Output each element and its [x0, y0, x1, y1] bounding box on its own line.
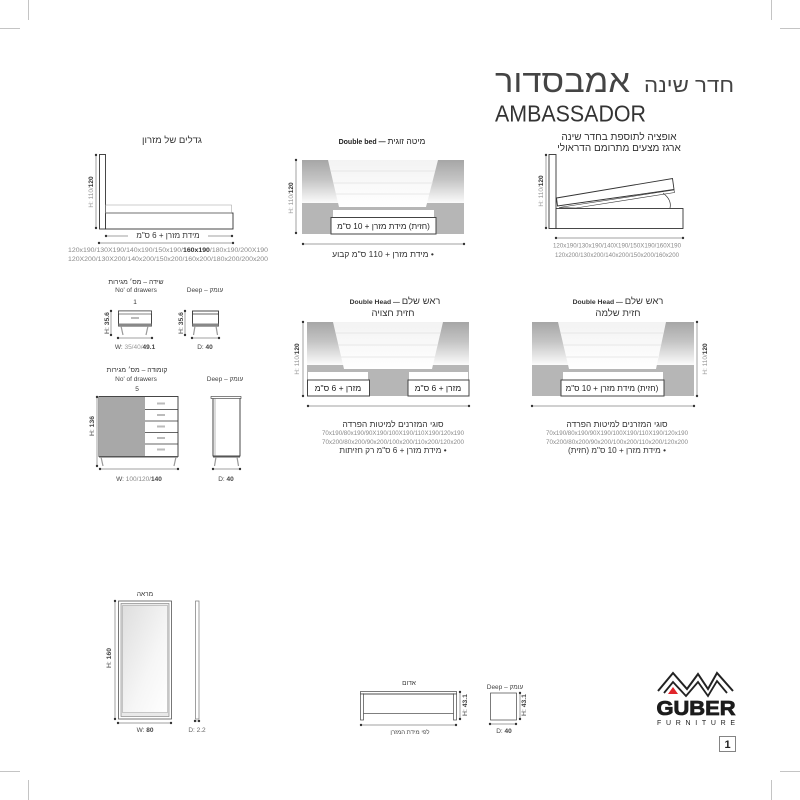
- heading: Double bed — מיטה זוגית: [339, 136, 426, 146]
- panel: double head, full front: [532, 295, 709, 455]
- panel: double bed: [288, 136, 464, 259]
- panel: nightstand: H: 35.6: [104, 312, 111, 334]
- panel: double bed: (חזית) מידת מזרן + 10 ס"מ: [337, 222, 430, 231]
- panel: nightstand depth: [178, 287, 223, 351]
- panel: double head, full front: H: 110/120: [702, 343, 709, 375]
- panel: chest of drawers: No' of drawers: [115, 376, 158, 383]
- panel: nightstand depth: Deep – עומק: [187, 287, 223, 294]
- mattress types text: סוגי המזרנים למיטות הפרדה: [342, 419, 444, 429]
- panel: mattress sizes side view: 120x190/130X190/140x190/150x190/ 160x190 /180x190/200X190: [68, 247, 268, 254]
- panel: double head, full front: (חזית) מידת מזרן + 10 ס"מ: [566, 384, 659, 393]
- mattress types text: סוגי המזרנים למיטות הפרדה: [566, 419, 668, 429]
- logo: Guber Furniture: GUBER: [656, 698, 736, 720]
- heading: גדלים של מזרון: [142, 134, 202, 146]
- panel: hydraulic lift bed option: 120x190/130x190/140X190/150X190/160X190: [553, 242, 681, 250]
- logo: Guber Furniture: FURNITURE: [657, 720, 735, 727]
- title: אמבסדור: [495, 63, 630, 99]
- panel: mirror: [106, 591, 206, 734]
- title: AMBASSADOR: [495, 100, 646, 126]
- panel: bench: [360, 680, 469, 736]
- panel: double head, partial front: 70x200/80x200/90x200/100x200/110x200/120x200: [322, 439, 464, 446]
- panel: bench: אדום: [402, 680, 416, 687]
- panel: nightstand: 1: [133, 299, 137, 306]
- heading: Double Head — ראש שלם: [350, 295, 440, 307]
- panel: bench depth: Deep – עומק: [487, 684, 523, 691]
- panel: mirror: מראה: [137, 591, 153, 598]
- panel: nightstand: [104, 279, 164, 351]
- panel: bench depth: D: 40: [496, 728, 512, 735]
- panel: nightstand depth: D: 40: [197, 344, 213, 351]
- panel: mattress sizes side view: מידת מזרן + 6 ס"מ: [136, 231, 200, 240]
- panel: mirror: D: 2.2: [188, 727, 206, 734]
- panel: nightstand: W: 35/40/49.1: [115, 344, 156, 351]
- page number: [720, 736, 736, 752]
- panel: bench: לפי מידת המזרן: [390, 728, 430, 736]
- panel: double head, partial front: • מידת מזרן + 6 ס"מ רק חזיתות: [339, 446, 447, 455]
- panel: mirror: H: 160: [106, 648, 113, 668]
- panel: mirror: W: 80: [137, 727, 154, 734]
- panel: bench depth: H: 43.1: [521, 694, 528, 716]
- panel: nightstand: שידה – מס׳ מגירות: [108, 279, 164, 286]
- panel: double head, partial front: חזית חצויה: [371, 308, 415, 319]
- logo: Guber Furniture: [656, 673, 736, 727]
- panel: mattress sizes side view: [68, 134, 268, 263]
- page number: 1: [724, 739, 731, 751]
- panel: double head, full front: • מידת מזרן + 10 ס"מ (חזית): [568, 446, 666, 455]
- panel: nightstand: No' of drawers: [115, 287, 158, 294]
- panel: chest depth: Deep – עומק: [207, 376, 243, 383]
- panel: double head, full front: 70x190/80x190/90X190/100X190/110X190/120x190: [546, 430, 688, 437]
- panel: chest of drawers: [89, 367, 178, 483]
- panel: chest depth: D: 40: [218, 476, 234, 483]
- icon: red triangle: [668, 687, 678, 694]
- panel: double bed: H: 110/120: [288, 182, 295, 214]
- panel: double head, full front: חזית שלמה: [595, 307, 641, 319]
- title: חדר שינה: [644, 75, 734, 97]
- panel: chest of drawers: W: 100/120/140: [116, 476, 162, 483]
- panel: nightstand depth: H: 35.6: [178, 312, 185, 334]
- panel: double head, partial front: H: 110/120: [294, 343, 301, 375]
- panel: bench: H: 43.1: [462, 694, 469, 716]
- title: [495, 63, 734, 126]
- panel: mattress sizes side view: 120X200/130X200/140x200/150x200/160x200/180x200/200x200: [68, 256, 268, 263]
- panel: chest of drawers: H: 136: [89, 416, 96, 436]
- panel: chest depth: [207, 376, 243, 483]
- icon: mountains: [658, 673, 733, 696]
- panel: chest of drawers: קומודה – מס׳ מגירות: [107, 367, 167, 374]
- panel: double head, full front: 70x200/80x200/90x200/100x200/110x200/120x200: [546, 439, 688, 446]
- heading: Double Head — ראש שלם: [573, 295, 663, 307]
- panel: double head, partial front: 70x190/80x190/90X190/100X190/110X190/120x190: [322, 430, 464, 437]
- panel: double head, partial front: [294, 295, 469, 455]
- panel: hydraulic lift bed option: H: 110/120: [538, 175, 545, 207]
- heading: option: אופציה לתוספת בחדר שינה: [561, 131, 677, 143]
- panel: mattress sizes side view: H: 110/120: [88, 176, 95, 208]
- panel: hydraulic lift bed option: 120x200/130x200/140x200/150x200/160x200: [555, 252, 679, 259]
- panel: double head, partial front: מזרן + 6 ס"מ: [415, 383, 461, 393]
- panel: bench depth: [487, 684, 528, 735]
- panel: hydraulic lift bed option: [538, 131, 683, 259]
- note: • מידת מזרן + 110 ס"מ קבוע: [332, 249, 434, 259]
- panel: hydraulic lift bed option: ארגז מצעים מתרומם הדראולי: [557, 142, 682, 154]
- panel: double head, partial front: מזרן + 6 ס"מ: [315, 383, 361, 393]
- panel: chest of drawers: 5: [135, 386, 139, 393]
